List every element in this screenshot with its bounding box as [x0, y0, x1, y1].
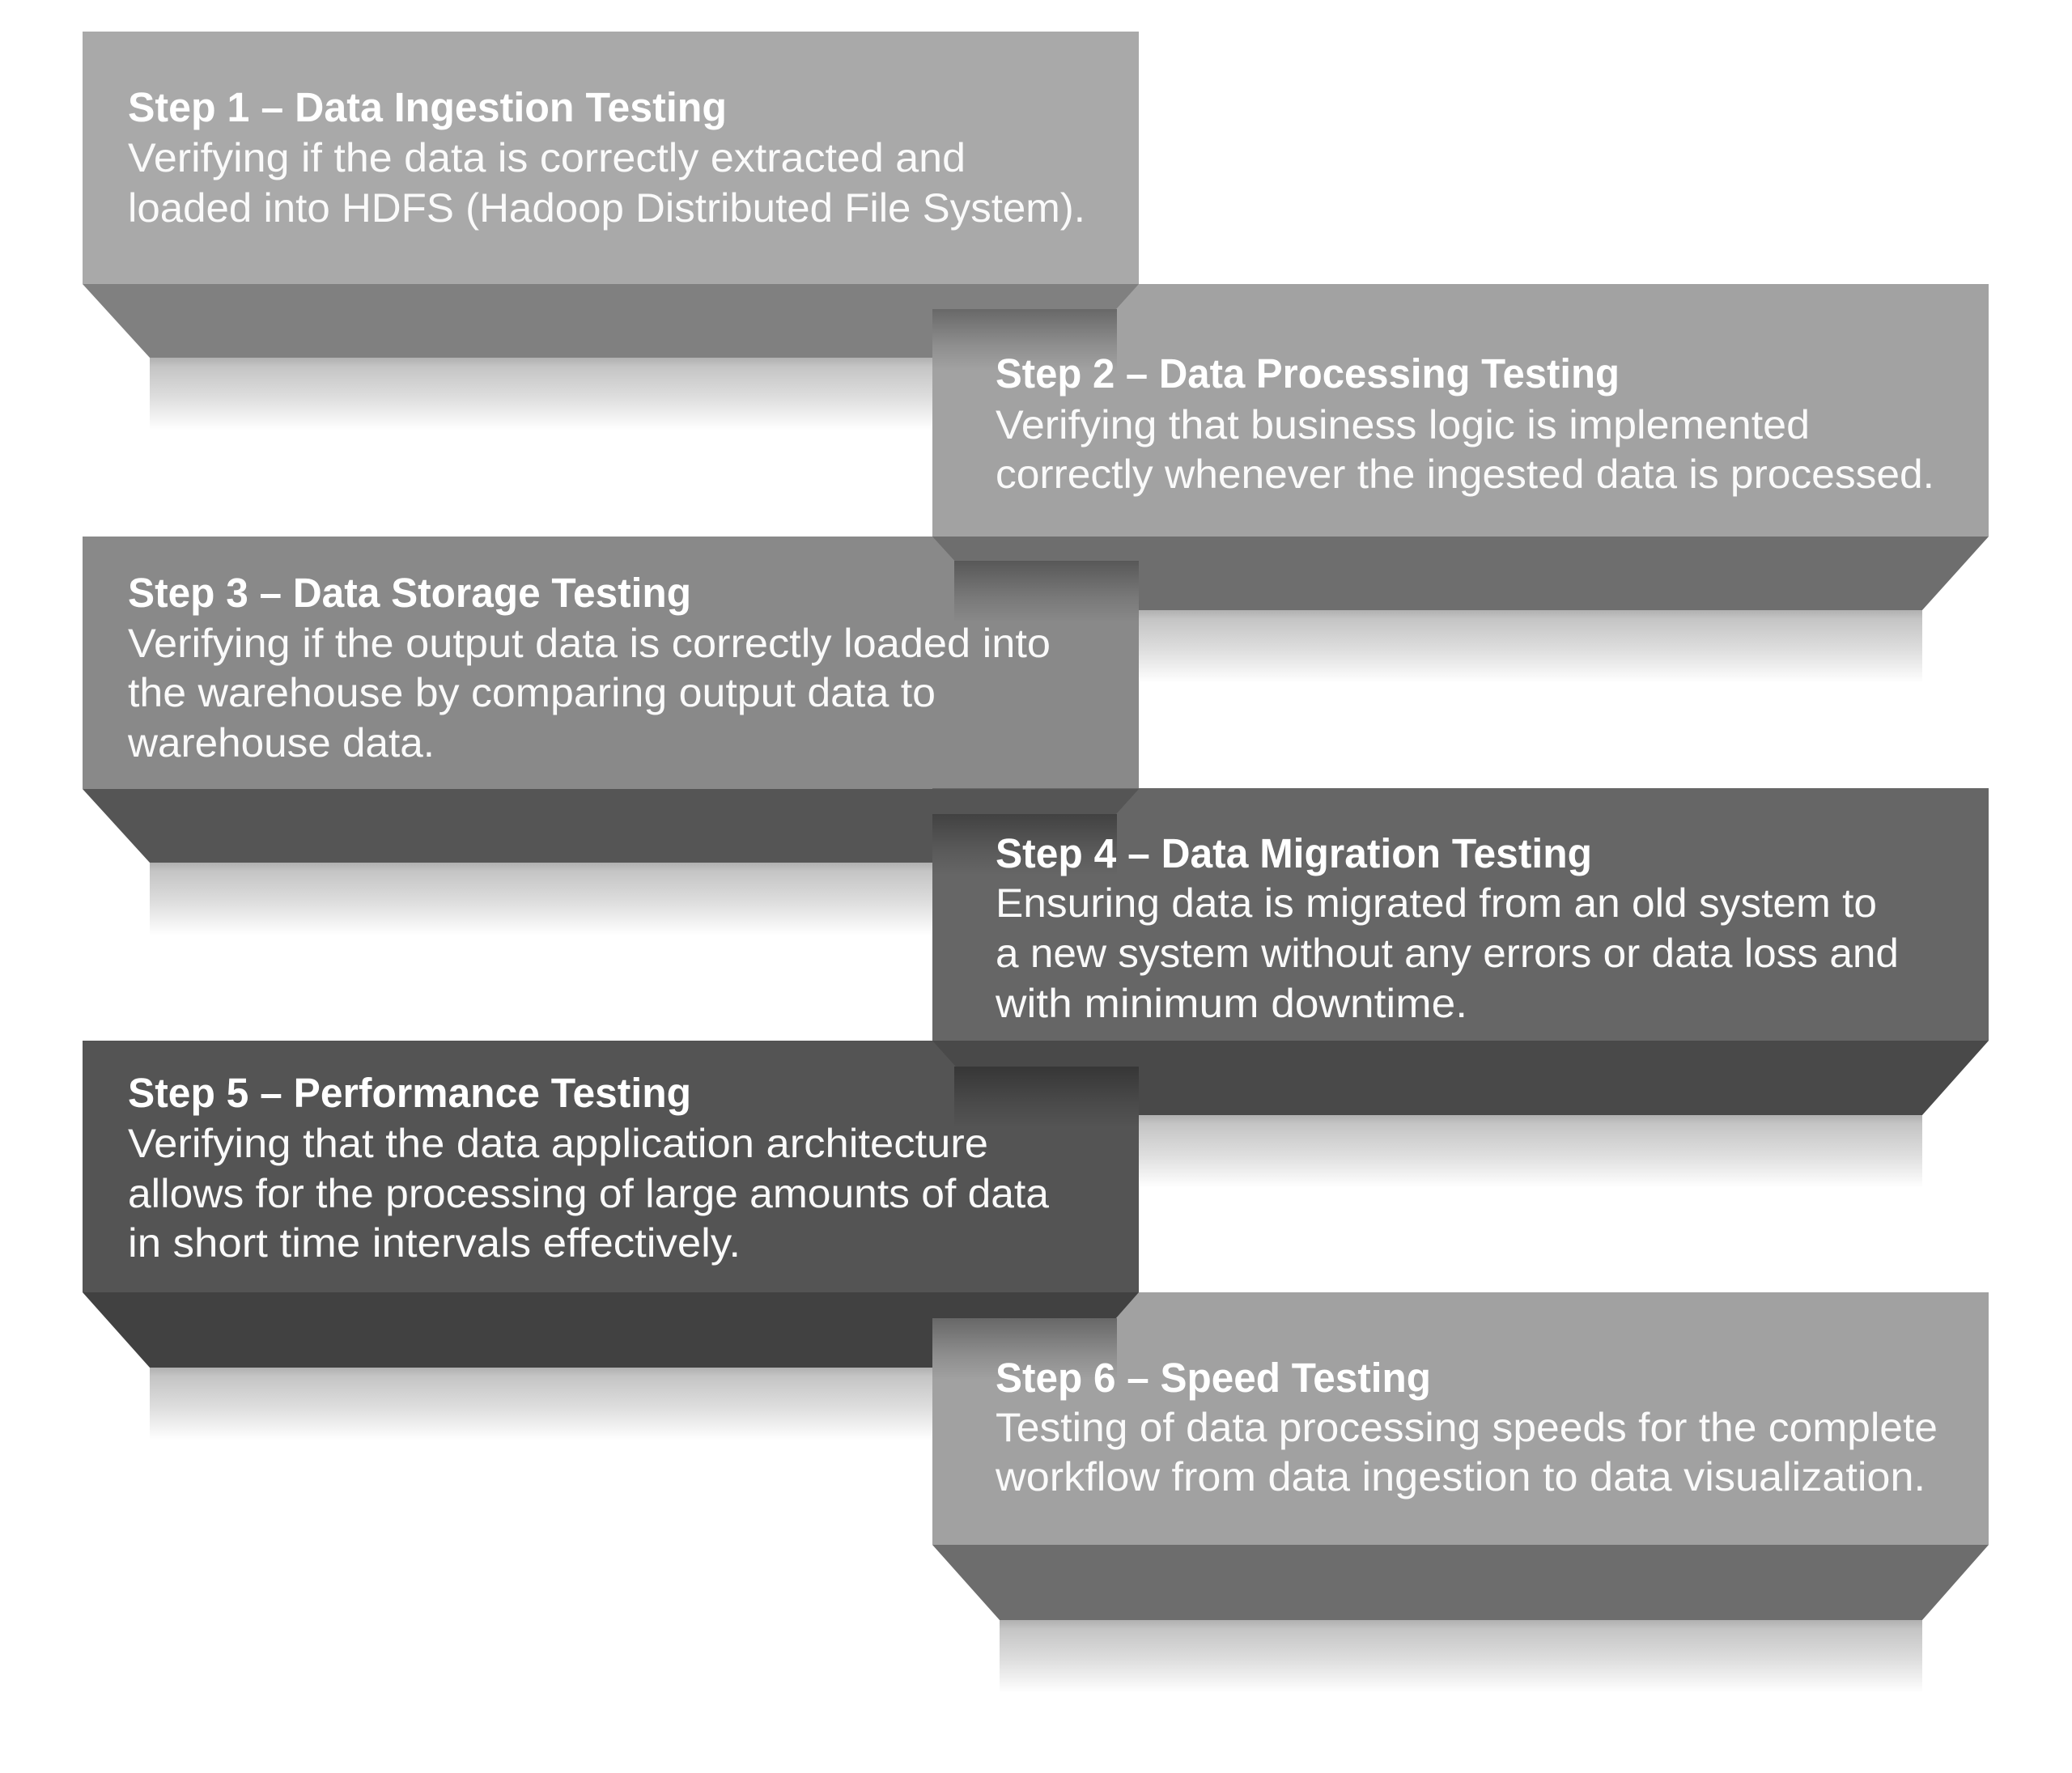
- heading: step 3: Step 3 – Data Storage Testing: [128, 570, 691, 616]
- text block: step 2: [996, 350, 1934, 497]
- body: step 4: [995, 880, 1899, 1026]
- body: step 4: Ensuring data is migrated from an old system to: [996, 880, 1877, 926]
- body: step 5: in short time intervals effectively.: [128, 1220, 741, 1266]
- heading: step 1: Step 1 – Data Ingestion Testing: [128, 84, 727, 130]
- panel: step 4: [932, 788, 1989, 1041]
- heading: step 4: Step 4 – Data Migration Testing: [996, 830, 1592, 876]
- shadow: step 5: [150, 1368, 1072, 1440]
- fold: step 5: [83, 1292, 1139, 1368]
- text block: step 5: [128, 1070, 1049, 1266]
- shadow: step 2: [1000, 610, 1922, 683]
- shadow: step 1: [150, 358, 1072, 431]
- text block: step 3: [127, 570, 1051, 766]
- panel: step 6: [932, 1292, 1989, 1545]
- body: step 3: Verifying if the output data is correctly loaded into: [128, 621, 1051, 666]
- panel: step 3: [83, 537, 1139, 789]
- body: step 5: allows for the processing of large amounts of data: [128, 1171, 1049, 1216]
- text block: step 4: [995, 830, 1899, 1026]
- heading: step 2: Step 2 – Data Processing Testing: [996, 350, 1620, 397]
- body: step 3: warehouse data.: [127, 720, 435, 766]
- panel: step 1: [83, 32, 1139, 284]
- notch: step 4: [932, 814, 1117, 876]
- fold: step 2: [932, 537, 1989, 610]
- body: step 1: Verifying if the data is correctly extracted and: [128, 135, 966, 180]
- fold: step 4: [932, 1041, 1989, 1115]
- body: step 3: the warehouse by comparing output data to: [128, 670, 936, 715]
- body: step 2: correctly whenever the ingested data is processed.: [996, 452, 1934, 497]
- body: step 6: Testing of data processing speeds for the complete: [996, 1405, 1938, 1450]
- panel: step 2: [932, 284, 1989, 537]
- heading: step 6: Step 6 – Speed Testing: [996, 1355, 1431, 1401]
- body: step 4: with minimum downtime.: [995, 981, 1467, 1026]
- shadow: step 6: [1000, 1620, 1922, 1693]
- text block: step 1: [128, 84, 1085, 231]
- shadow: step 3: [150, 863, 1072, 935]
- fold: step 6: [932, 1545, 1989, 1620]
- fold: step 1: [83, 284, 1139, 358]
- body: step 5: [128, 1121, 1049, 1266]
- heading: step 5: Step 5 – Performance Testing: [128, 1070, 691, 1116]
- body: step 6: workflow from data ingestion to data visualization.: [995, 1454, 1926, 1499]
- notch: step 6: [932, 1318, 1117, 1380]
- body: step 5: Verifying that the data application architecture: [128, 1121, 988, 1166]
- notch: step 3: [954, 561, 1139, 622]
- body: step 1: loaded into HDFS (Hadoop Distributed File System).: [128, 185, 1085, 231]
- notch: step 2: [932, 309, 1117, 371]
- notch: step 5: [954, 1067, 1139, 1128]
- fold: step 3: [83, 789, 1139, 863]
- body: step 1: [128, 135, 1085, 231]
- panel: step 5: [83, 1041, 1139, 1292]
- body: step 6: [995, 1405, 1938, 1499]
- body: step 2: [996, 402, 1934, 497]
- body: step 4: a new system without any errors or data loss and: [996, 931, 1899, 976]
- text block: step 6: [995, 1355, 1938, 1499]
- shadow: step 4: [1000, 1115, 1922, 1188]
- body: step 2: Verifying that business logic is implemented: [996, 402, 1810, 447]
- body: step 3: [127, 621, 1051, 766]
